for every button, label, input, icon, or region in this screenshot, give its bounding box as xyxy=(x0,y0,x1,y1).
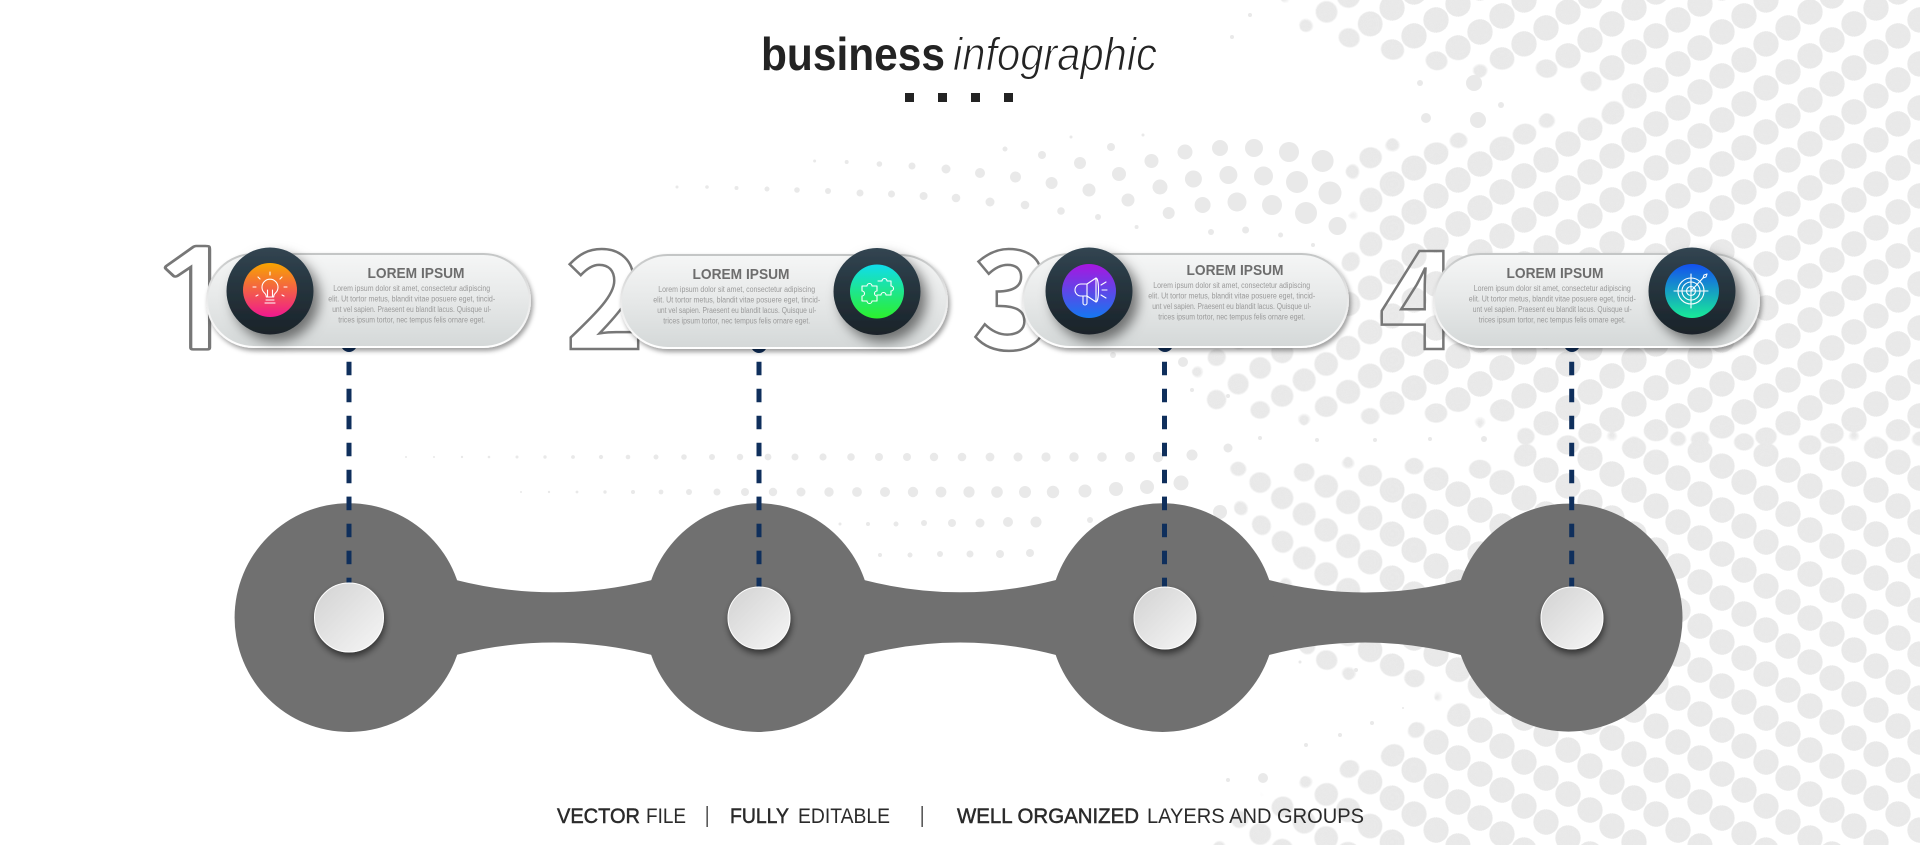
footer tagline: VECTOR xyxy=(557,805,640,828)
body text 1: Lorem ipsum dolor sit amet, consectetur adipiscing xyxy=(333,284,490,293)
icon: puzzle badge xyxy=(834,248,920,335)
card 1 xyxy=(207,254,530,347)
body text 2: trices ipsum tortor, nec tempus felis ornare eget. xyxy=(663,316,810,326)
dashes over the band xyxy=(346,497,1574,591)
footer tagline: FULLY xyxy=(730,805,789,828)
body text 3: elit. Ut tortor metus, blandit vitae posuere eget, tincid- xyxy=(1148,292,1315,300)
title: infographic xyxy=(953,28,1157,80)
icon: megaphone badge xyxy=(1046,248,1132,334)
body text 3: unt vel sapien. Praesent eu blandit lacus. Quisque ul- xyxy=(1152,302,1311,311)
card 3 xyxy=(1023,254,1348,347)
card 4 xyxy=(1434,254,1759,347)
icon: target badge xyxy=(1648,248,1736,334)
heading 2: LOREM IPSUM xyxy=(692,266,790,283)
body text 1 xyxy=(328,284,495,324)
icon: light bulb badge xyxy=(226,248,314,334)
panel: step 4 xyxy=(1379,192,1759,389)
dashed connector lines xyxy=(349,362,1572,500)
number 2: 2 xyxy=(565,192,645,389)
body text 2 xyxy=(653,285,820,326)
footer tagline: FILE xyxy=(646,805,686,828)
body text 2: elit. Ut tortor metus, blandit vitae posuere eget, tincid- xyxy=(653,296,820,304)
timeline node circles xyxy=(314,583,1603,652)
panel: step 3 xyxy=(972,192,1348,389)
heading 3: LOREM IPSUM xyxy=(1186,262,1284,279)
footer tagline xyxy=(557,805,1364,828)
footer tagline: LAYERS AND GROUPS xyxy=(1147,805,1364,828)
body text 1: elit. Ut tortor metus, blandit vitae posuere eget, tincid- xyxy=(328,294,495,304)
title: business xyxy=(761,28,945,80)
heading 4: LOREM IPSUM xyxy=(1506,265,1604,282)
body text 1: trices ipsum tortor, nec tempus felis ornare eget. xyxy=(338,316,485,324)
footer tagline: EDITABLE xyxy=(798,805,890,828)
title xyxy=(761,28,1157,80)
body text 4: trices ipsum tortor, nec tempus felis ornare eget. xyxy=(1479,316,1626,324)
body text 1: unt vel sapien. Praesent eu blandit lacus. Quisque ul- xyxy=(332,305,491,314)
card 2 xyxy=(621,255,947,348)
panel: step 1 xyxy=(143,234,530,370)
timeline band xyxy=(235,503,1683,732)
number 3: 3 xyxy=(972,192,1052,389)
footer tagline: WELL ORGANIZED xyxy=(957,805,1139,828)
body text 4: unt vel sapien. Praesent eu blandit lacus. Quisque ul- xyxy=(1473,305,1632,314)
body text 3: Lorem ipsum dolor sit amet, consectetur adipiscing xyxy=(1153,281,1310,290)
body text 4: Lorem ipsum dolor sit amet, consectetur adipiscing xyxy=(1474,284,1631,293)
body text 4 xyxy=(1469,284,1636,324)
number 4: 4 xyxy=(1379,192,1459,389)
body text 3: trices ipsum tortor, nec tempus felis ornare eget. xyxy=(1158,312,1305,322)
body text 2: Lorem ipsum dolor sit amet, consectetur adipiscing xyxy=(658,285,815,294)
body text 2: unt vel sapien. Praesent eu blandit lacus. Quisque ul- xyxy=(657,306,816,315)
connector anchor dots xyxy=(341,336,1580,353)
title decoration: four squares xyxy=(905,93,1013,102)
heading 1: LOREM IPSUM xyxy=(368,265,464,282)
panel: step 2 xyxy=(565,192,947,389)
body text 3 xyxy=(1148,281,1315,322)
background halftone dots xyxy=(405,0,1920,845)
body text 4: elit. Ut tortor metus, blandit vitae posuere eget, tincid- xyxy=(1469,294,1636,304)
number 1: 1 xyxy=(143,234,250,370)
